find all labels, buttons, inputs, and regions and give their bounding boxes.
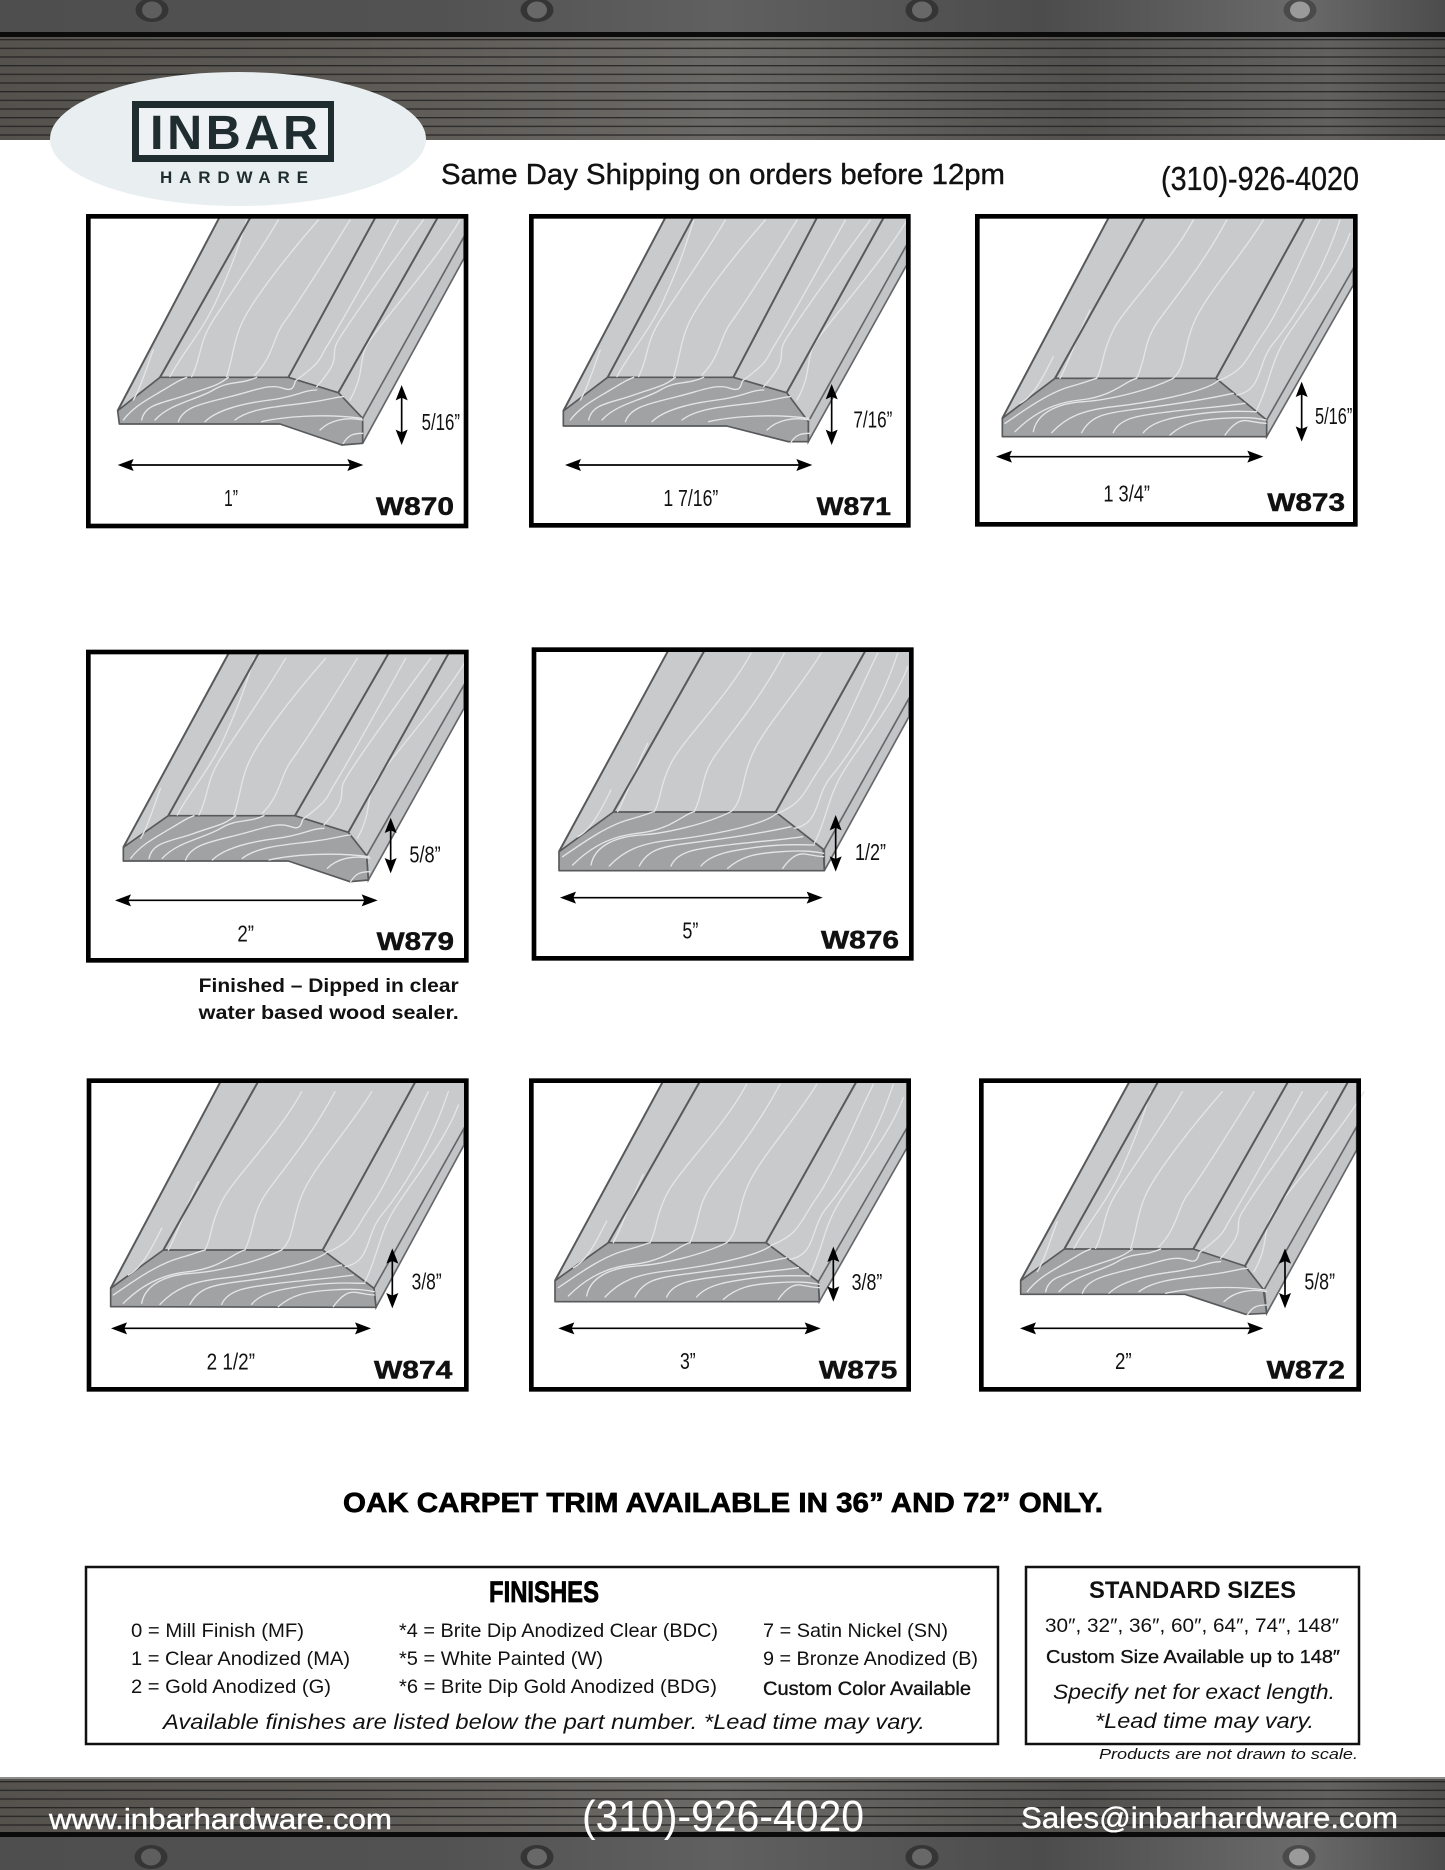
finish codes list: 2 = Gold Anodized (G) — [131, 1676, 331, 1698]
caption: finished note: Finished – Dipped in clear — [199, 975, 459, 997]
panel: W872: 5/8” — [1304, 1268, 1335, 1294]
logo: Inbar Hardware: INBAR — [150, 106, 318, 160]
panel: W876: 5” — [682, 917, 698, 943]
shipping notice: Same Day Shipping on orders before 12pm — [441, 159, 1005, 191]
panel: W874 — [89, 1081, 466, 1389]
finish codes list: 0 = Mill Finish (MF) — [131, 1620, 304, 1642]
panel: W870 — [88, 216, 466, 526]
panel: W876 — [534, 650, 911, 958]
panel: W874: 3/8” — [412, 1268, 442, 1294]
panel: W872: 2” — [1115, 1348, 1132, 1374]
panel: W879 — [88, 652, 467, 960]
panel: W870: 5/16” — [422, 409, 460, 435]
panel: standard sizes — [1026, 1567, 1359, 1744]
finish codes list: Custom Color Available — [763, 1679, 971, 1700]
panel: W872: W872 — [1267, 1356, 1345, 1384]
panel: W871: 1 7/16” — [663, 485, 718, 511]
panel: W875: W875 — [819, 1356, 897, 1384]
standard sizes heading: STANDARD SIZES — [1089, 1577, 1296, 1604]
finish codes list: *5 = White Painted (W) — [399, 1648, 603, 1670]
scale disclaimer: Products are not drawn to scale. — [1099, 1746, 1358, 1763]
footer metal band — [0, 1777, 1445, 1870]
panel: W871: W871 — [817, 493, 891, 521]
finish codes list — [131, 1620, 978, 1700]
panel: W871 — [531, 216, 908, 525]
finish codes list: 9 = Bronze Anodized (B) — [763, 1648, 978, 1670]
heading: availability: OAK CARPET TRIM AVAILABLE IN 36” AND 72” ONLY. — [343, 1487, 1103, 1518]
sizes list: 30″, 32″, 36″, 60″, 64″, 74″, 148″ — [1045, 1616, 1339, 1637]
panel: W875: 3” — [680, 1348, 696, 1374]
caption: sealer note: water based wood sealer. — [198, 1002, 459, 1024]
finish codes list: 7 = Satin Nickel (SN) — [763, 1620, 948, 1642]
panel: W873: W873 — [1267, 489, 1345, 517]
panel: W873 — [977, 216, 1355, 524]
custom size note: Custom Size Available up to 148″ — [1046, 1647, 1341, 1667]
header metal band — [0, 0, 1445, 140]
panel: W873: 5/16” — [1315, 403, 1352, 429]
finishes heading: FINISHES — [489, 1576, 599, 1609]
panel: W879: 2” — [237, 921, 254, 947]
panel: W879: W879 — [377, 928, 454, 956]
footer phone number: (310)-926-4020 — [582, 1792, 864, 1841]
footer website: www.inbarhardware.com — [48, 1804, 392, 1836]
panel: W873: 1 3/4” — [1103, 481, 1150, 507]
panel: W876: W876 — [821, 926, 899, 954]
panel: W875: 3/8” — [852, 1269, 882, 1295]
panel: W870: 1” — [224, 485, 238, 511]
logo: Inbar Hardware — [50, 72, 426, 206]
panel: W872 — [981, 1081, 1364, 1389]
panel: W874: W874 — [374, 1356, 452, 1384]
finish codes list: *4 = Brite Dip Anodized Clear (BDC) — [399, 1620, 718, 1642]
panel: W874: 2 1/2” — [207, 1348, 255, 1374]
panel: W870: W870 — [376, 493, 454, 521]
header phone number: (310)-926-4020 — [1161, 160, 1359, 197]
net length note: Specify net for exact length. — [1053, 1681, 1335, 1704]
finishes footnote: Available finishes are listed below the part number. *Lead time may vary. — [161, 1711, 925, 1734]
footer email: Sales@inbarhardware.com — [1021, 1802, 1398, 1835]
logo: Inbar Hardware: HARDWARE — [160, 168, 308, 187]
panel: finishes — [86, 1567, 998, 1744]
panel: W876: 1/2” — [855, 839, 886, 865]
finish codes list: *6 = Brite Dip Gold Anodized (BDG) — [399, 1676, 717, 1698]
finish codes list: 1 = Clear Anodized (MA) — [131, 1648, 350, 1670]
panel: W875 — [531, 1081, 909, 1389]
panel: W871: 7/16” — [853, 406, 892, 432]
lead time note: *Lead time may vary. — [1095, 1710, 1314, 1733]
panel: W879: 5/8” — [409, 841, 441, 867]
